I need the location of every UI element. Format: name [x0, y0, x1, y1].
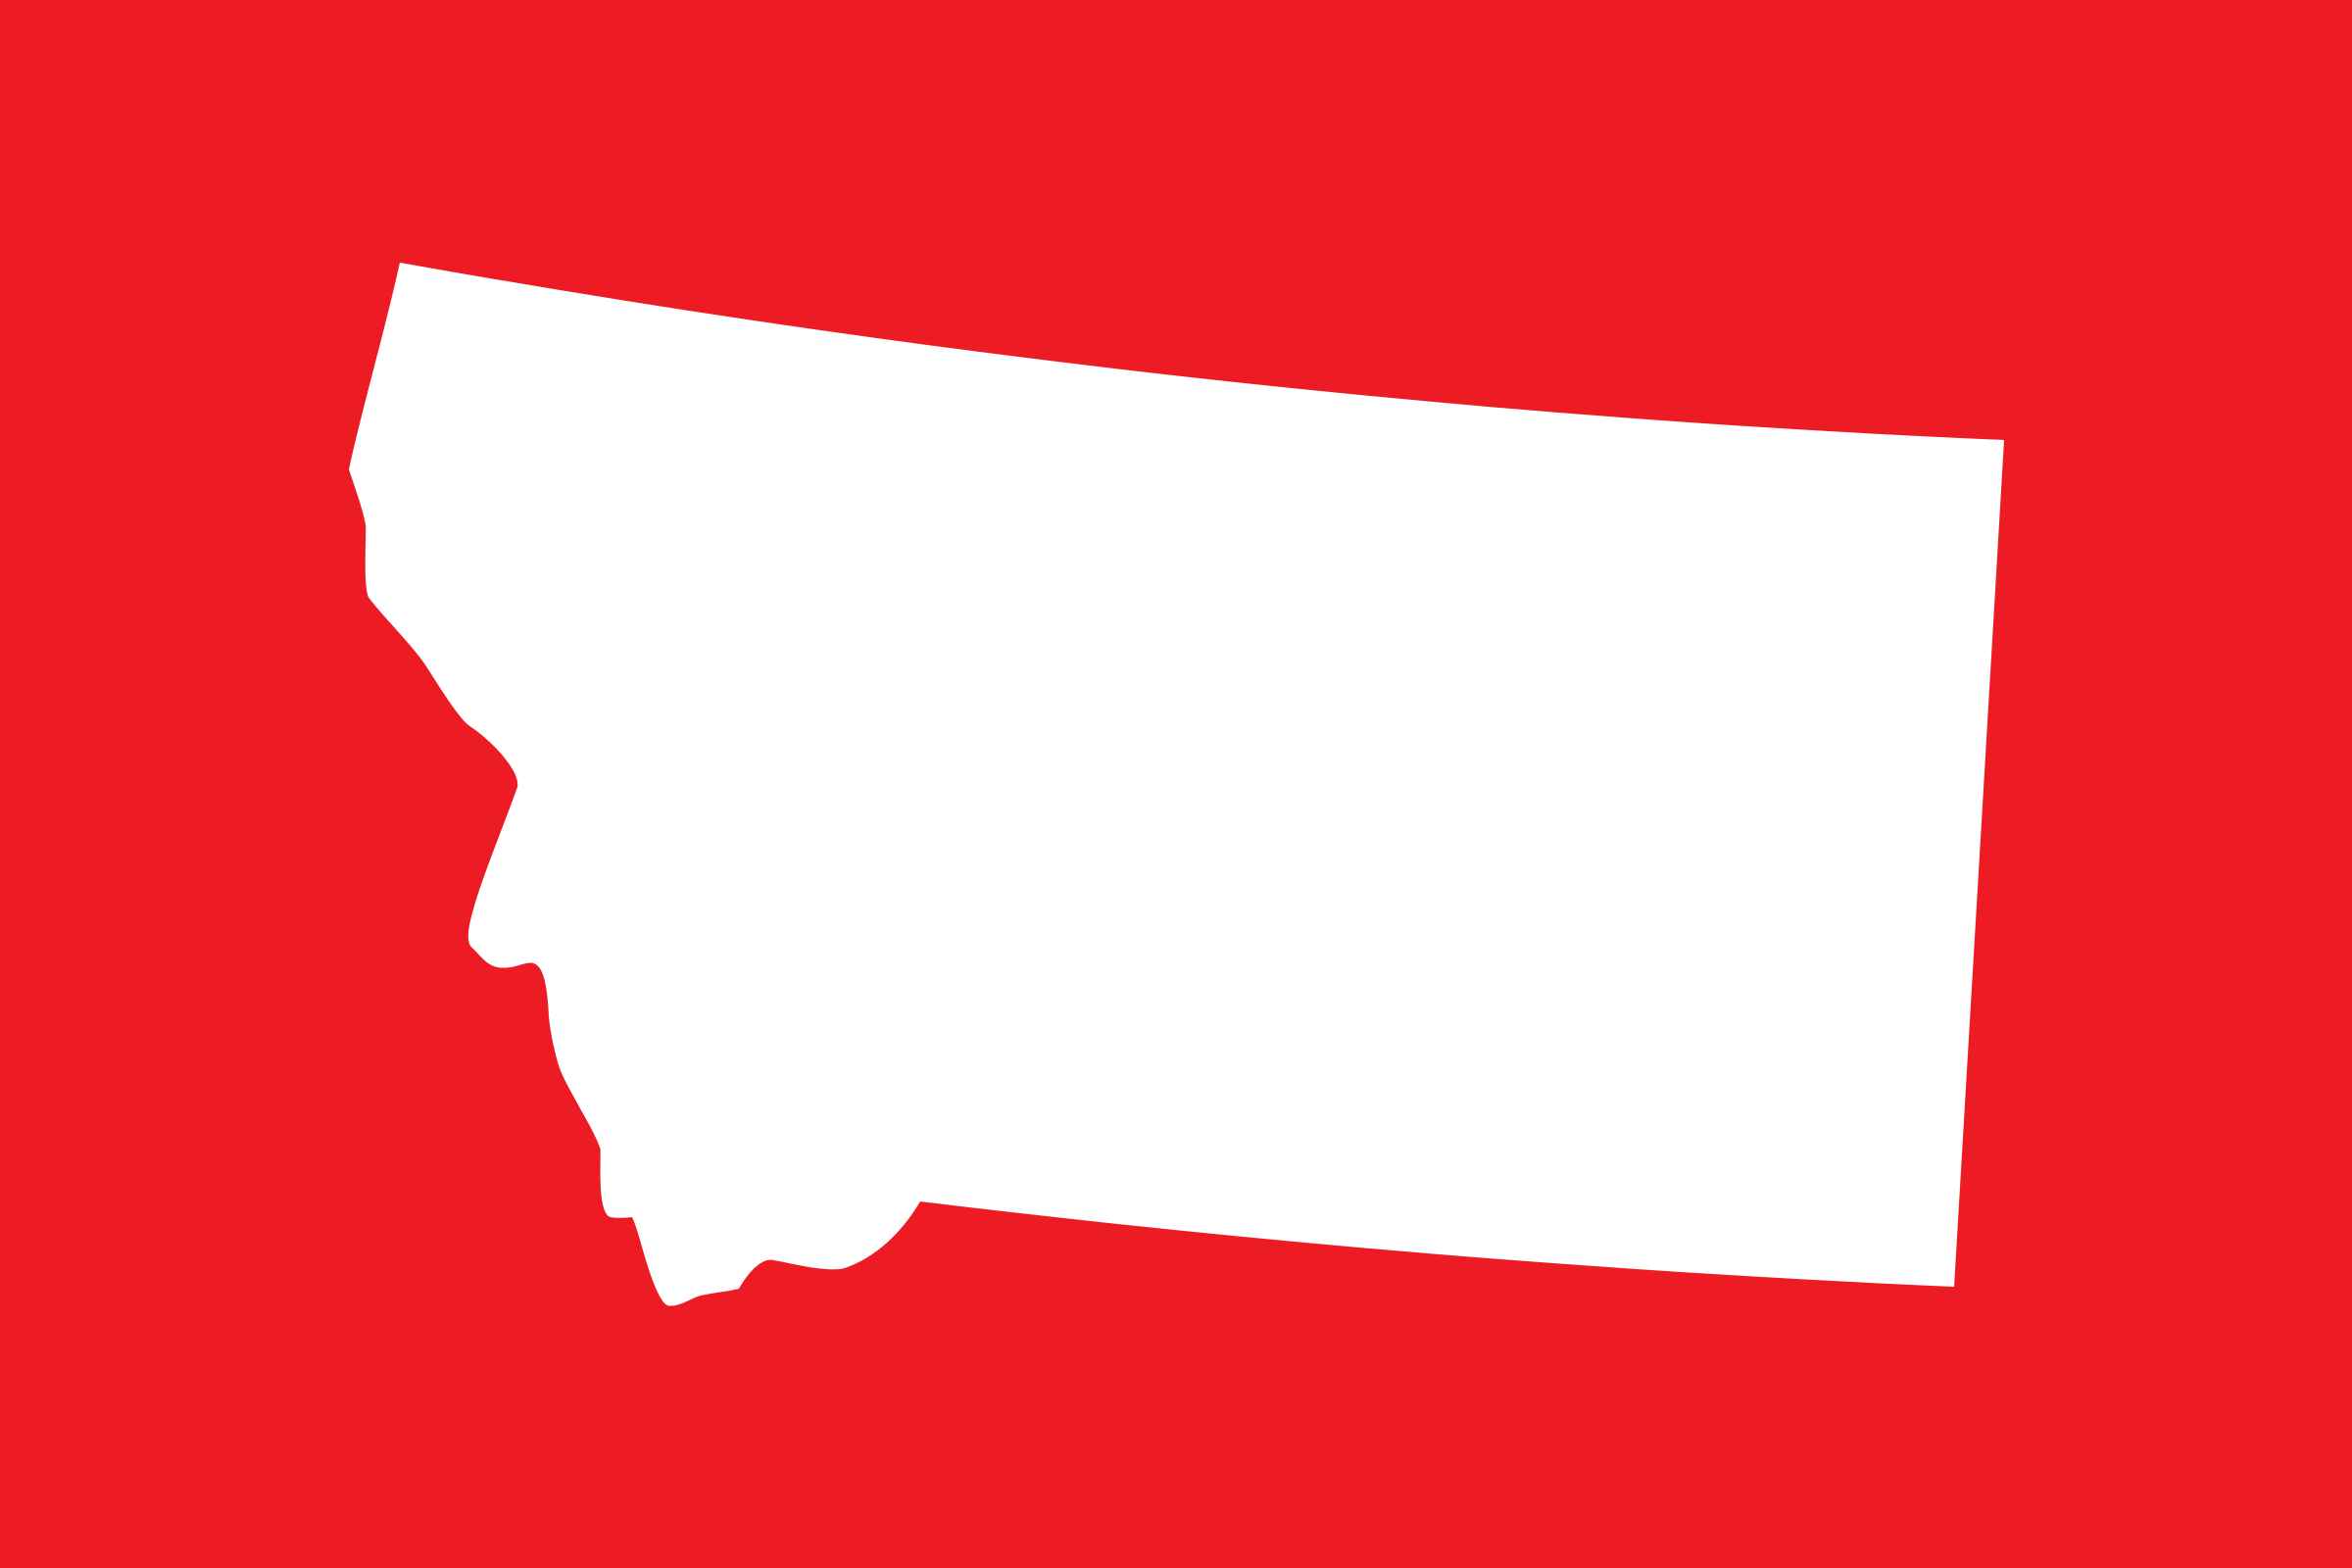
- icon: white Montana state shape: [349, 263, 2004, 1306]
